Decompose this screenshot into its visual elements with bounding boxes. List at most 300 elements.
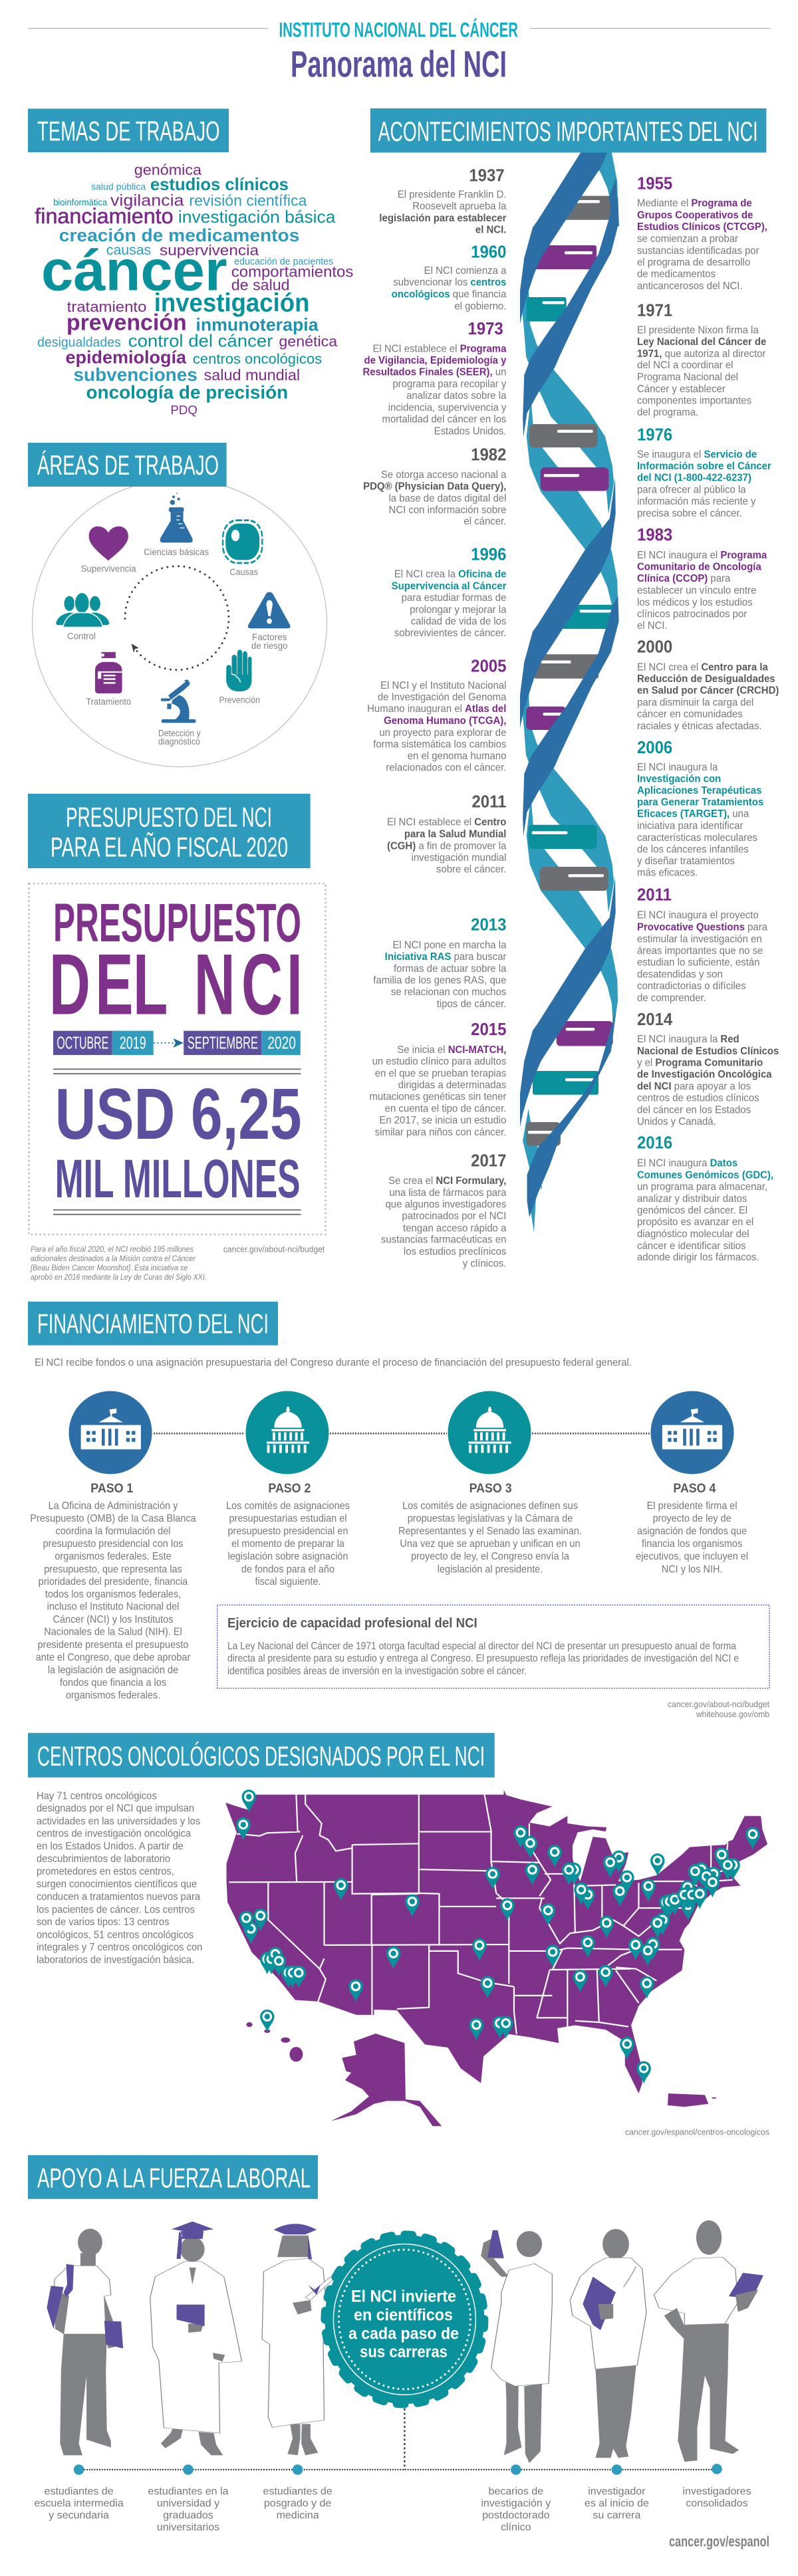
career labels: investigador (588, 2486, 646, 2497)
milestone 2013: 2013 (471, 916, 506, 935)
milestone 2017: Se crea el NCI Formulary, (388, 1175, 506, 1187)
panel: centros oncológicos (28, 1733, 769, 2137)
badge: el NCI invierte: a cada paso de (348, 2324, 459, 2343)
career labels: estudiantes de (45, 2486, 114, 2497)
career labels: escuela intermedia (34, 2498, 124, 2510)
step 4: ejecutivos, que incluyen el (636, 1550, 748, 1562)
word cloud: investigación básica (178, 207, 336, 227)
milestone 1955 (637, 175, 767, 292)
badge: el NCI invierte (325, 2235, 484, 2404)
paragraph: prometedores en estos centros, (37, 1865, 174, 1877)
map of the United States (225, 1790, 767, 2126)
milestone 2006: 2006 (637, 739, 672, 757)
milestone 1976: Se inaugura el Servicio de (637, 449, 757, 461)
title: Panorama del NCI: Panorama del NCI (291, 43, 507, 84)
milestone 1982: la base de datos digital del (388, 493, 506, 504)
paragraph: actividades en las universidades y los (37, 1815, 200, 1827)
step icon 3: capitol (448, 1391, 531, 1474)
milestone 1983: el NCI. (637, 620, 668, 632)
milestone 2017: sustancias farmacéuticas en (381, 1234, 506, 1246)
step 2: el momento de preparar la (231, 1538, 344, 1550)
area labels: Detección y (158, 728, 201, 738)
word cloud: subvenciones (73, 364, 198, 385)
heading: centros oncológicos designados: CENTROS ONCOLÓGICOS DESIGNADOS POR EL NCI (37, 1740, 485, 1772)
milestone 2011 provocative questions: estudian lo suficiente, están (637, 957, 759, 969)
milestone 2014: del NCI para apoyar a los (637, 1080, 751, 1092)
milestone 2011 global health: El NCI establece el Centro (387, 816, 506, 828)
paragraph: centros de investigación oncológica (37, 1827, 192, 1839)
milestone 2015: en el que se prueban terapias (375, 1068, 507, 1080)
icon: heart (89, 527, 128, 560)
milestone 2016: cáncer e identificar sitios (637, 1240, 746, 1252)
badge: el NCI invierte: El NCI invierte (351, 2287, 456, 2306)
big text: presupuesto: PRESUPUESTO (53, 893, 301, 953)
milestone 1996: prolongar y mejorar la (410, 604, 507, 616)
panel: temas de trabajo (28, 109, 353, 417)
step 3: legislación al presidente. (438, 1564, 543, 1575)
milestone 2006: características moleculares (637, 832, 757, 844)
milestone 2017: tengan acceso rápido a (403, 1223, 507, 1234)
heading: presupuesto del NCI: PRESUPUESTO DEL NCI (66, 802, 272, 832)
big number: USD 6,25: USD 6,25 (55, 1074, 302, 1155)
panel: acontecimientos importantes (362, 0, 779, 1269)
milestone 1960: El NCI comienza a (424, 265, 507, 277)
big text: mil millones: MIL MILLONES (55, 1149, 301, 1209)
step 3: Una vez que se aprueban y unifican en un (400, 1538, 581, 1550)
milestone 2011 provocative questions: estimular la investigación en (637, 933, 762, 945)
paragraph: en los Estados Unidos. A partir de (37, 1841, 184, 1852)
map: state borders (229, 1795, 735, 2034)
icon: people (56, 592, 110, 628)
word cloud: oncología de precisión (86, 382, 288, 403)
milestone 1955: Mediante el Programa de (637, 197, 752, 209)
milestone 2011 provocative questions: de comprender. (637, 993, 706, 1004)
milestone 2000: 2000 (637, 638, 672, 657)
milestone 1982: 1982 (471, 446, 506, 465)
paragraph: laboratorios de investigación básica. (37, 1954, 194, 1966)
milestone 2017: y clínicos. (463, 1258, 506, 1269)
milestone 2014 (637, 1010, 779, 1127)
milestone 1973: Estados Unidos. (434, 425, 506, 437)
paragraph (37, 1790, 202, 1966)
milestone 1983: 1983 (637, 527, 672, 544)
milestone 1955: Grupos Cooperativos de (637, 209, 753, 221)
source links (668, 1699, 769, 1719)
milestone 1971: Programa Nacional del (637, 372, 738, 383)
milestone 1996: para estudiar formas de (402, 592, 506, 604)
milestone 2000: cáncer en comunidades (637, 709, 743, 720)
milestone 2011 global health: para la Salud Mundial (404, 828, 506, 840)
figure: school student (47, 2229, 123, 2455)
left timeline column (362, 167, 507, 1269)
word cloud: causas (106, 243, 151, 258)
milestone 2006: más eficaces. (637, 867, 698, 879)
milestone 2011 global health: (CGH) a fin de promover la (387, 840, 507, 852)
step 1: PASO 1 (90, 1481, 133, 1496)
career labels: y secundaria (49, 2510, 109, 2521)
milestone 2014: y el Programa Comunitario (637, 1057, 763, 1069)
milestone 1996: calidad de vida de los (411, 616, 507, 628)
milestone 2015: similar para niños con cáncer. (375, 1127, 506, 1138)
step 3: Representantes y el Senado las examinan. (398, 1526, 582, 1537)
milestone 1996 (392, 546, 507, 639)
source links: whitehouse.gov/omb (696, 1709, 769, 1719)
step 4: financia los organismos (642, 1538, 743, 1550)
source links: cancer.gov/about-nci/budget (668, 1699, 769, 1709)
milestone 1982: PDQ® (Physician Data Query), (363, 481, 506, 493)
milestone 2006: El NCI inaugura la (637, 761, 718, 773)
milestone 2011 provocative questions: 2011 (637, 886, 672, 905)
area labels: Prevención (219, 695, 260, 705)
milestone 1982: Se otorga acceso nacional a (381, 469, 507, 481)
heading: áreas de trabajo: ÁREAS DE TRABAJO (37, 449, 219, 481)
area labels (67, 547, 287, 747)
milestone 1982 (363, 446, 507, 527)
milestone 2011 global health: sobre el cáncer. (436, 864, 506, 876)
map pins (236, 1790, 760, 2083)
footnote: adicionales destinados a la Misión contra el Cáncer (31, 1254, 196, 1263)
paragraph: designados por el NCI que impulsan (37, 1802, 194, 1814)
step 4: NCI y los NIH. (662, 1564, 722, 1575)
milestone 2011 global health: 2011 (471, 793, 507, 812)
milestone 1960: oncológicos que financia (392, 289, 507, 300)
paragraph: surgen conocimientos científicos que (37, 1878, 197, 1890)
step 2: de fondos para el año (241, 1564, 334, 1575)
milestone 2015: mutaciones genéticas sin tener (369, 1091, 506, 1103)
milestone 2016: propósito es avanzar en el (637, 1217, 753, 1228)
heading: financiamiento del NCI (28, 1302, 278, 1346)
word cloud: financiamiento (35, 204, 174, 228)
milestone 2005: de Investigación del Genoma (378, 691, 507, 703)
milestone 2011 provocative questions: El NCI inaugura el proyecto (637, 909, 759, 921)
paragraph: oncológicos, 51 centros oncológicos (37, 1929, 194, 1940)
milestone 1955: sustancias identificadas por (637, 245, 759, 257)
milestone 1971: del NCI a coordinar el (637, 360, 733, 371)
big text: del NCI: DEL NCI (49, 937, 303, 1033)
figures (47, 2220, 763, 2463)
milestone 2005 (367, 657, 507, 774)
step icon 2: capitol (246, 1391, 329, 1474)
figure: postdoctoral researcher (481, 2230, 552, 2463)
paragraph: Hay 71 centros oncológicos (37, 1790, 157, 1802)
milestone 2016: 2016 (637, 1134, 672, 1153)
date range: octubre 2019 (53, 1031, 154, 1055)
step 2: PASO 2 (268, 1481, 311, 1496)
heading: apoyo a la fuerza laboral: APOYO A LA FUERZA LABORAL (37, 2163, 311, 2194)
milestone 2005: Genoma Humano (TCGA), (384, 715, 506, 727)
step 2 (226, 1481, 350, 1587)
word cloud: estudios clínicos (150, 174, 289, 194)
date range: octubre 2019: 2019 (120, 1033, 146, 1053)
milestone 2016: un programa para almacenar, (637, 1181, 767, 1193)
milestone 2006 (637, 739, 763, 879)
step 2: fiscal siguiente. (255, 1576, 321, 1587)
milestone 2006: Aplicaciones Terapéuticas (637, 785, 761, 796)
career labels (34, 2486, 751, 2533)
timeline (74, 2408, 722, 2475)
milestone 1960: el gobierno. (454, 300, 506, 312)
milestone 1955: Estudios Clínicos (CTCGP), (637, 221, 767, 233)
icon: warning triangle (248, 592, 291, 628)
milestone 2017: que algunos investigadores (385, 1199, 507, 1211)
word cloud: revisión científica (189, 192, 307, 209)
step 1: Cáncer (NCI) y los Institutos (53, 1613, 174, 1625)
step 3: proyecto de ley, el Congreso envía la (411, 1550, 569, 1562)
milestone 1937: Roosevelt aprueba la (412, 201, 507, 212)
source link: cancer.gov/espanol/centros-oncologicos (625, 2127, 769, 2137)
step 1: fondos que financia a los (60, 1677, 166, 1689)
milestone 2005: en el genoma humano (408, 751, 506, 762)
milestone 2011 global health (387, 793, 507, 876)
heading: áreas de trabajo (28, 443, 227, 487)
word cloud: centros oncológicos (193, 352, 322, 367)
milestone 2014: del cáncer en los Estados (637, 1104, 751, 1116)
milestone 1976: para ofrecer al público la (637, 484, 746, 496)
step 1: La Oficina de Administración y (49, 1500, 178, 1512)
word cloud: genómica (134, 162, 202, 178)
step 1: presupuesto, que representa las (44, 1564, 182, 1575)
icon: microscope (161, 679, 196, 723)
word cloud: inmunoterapia (196, 314, 319, 334)
step icon 4: white house (650, 1391, 734, 1474)
milestone 1973: El NCI establece el Programa (372, 343, 507, 354)
milestone 1973: programa para recopilar y (392, 378, 507, 390)
milestone 2011 provocative questions: contradictorias o difíciles (637, 981, 746, 992)
word cloud: comportamientos (231, 263, 353, 280)
step 1: organismos federales. (66, 1689, 160, 1701)
step 1 (30, 1481, 196, 1701)
map: puerto rico (668, 2093, 716, 2107)
cycle icons (56, 493, 291, 723)
word cloud (35, 162, 353, 417)
step 2: legislación sobre asignación (227, 1550, 348, 1562)
milestone 1983 (637, 527, 767, 632)
milestone 1971: El presidente Nixon firma la (637, 324, 759, 336)
milestone 2015: Se inicia el NCI-MATCH, (397, 1044, 506, 1056)
footnote: Para el año fiscal 2020, el NCI recibió 195 millones (31, 1244, 194, 1254)
milestone 2013: tipos de cáncer. (437, 998, 506, 1010)
paragraph: conducen a tratamientos nuevos para (37, 1891, 201, 1903)
paragraph: descubrimientos de laboratorio (37, 1853, 170, 1865)
milestone 2013: familia de los genes RAS, que (373, 975, 506, 987)
milestone 2017: 2017 (471, 1152, 506, 1171)
career labels: clínico (501, 2522, 531, 2533)
milestone 1973: de Vigilancia, Epidemiología y (364, 355, 507, 366)
milestone 1971: 1971, que autoriza al director (637, 348, 766, 360)
step 1: ante el Congreso, que debe aprobar (36, 1651, 190, 1663)
icon: hand (226, 650, 251, 691)
career labels: universitarios (157, 2522, 219, 2533)
word cloud: bioinformática (53, 197, 107, 207)
milestone 1955: de medicamentos (637, 269, 716, 280)
milestone 1983: los médicos y los estudios (637, 596, 753, 608)
panel: áreas de trabajo (28, 443, 327, 767)
career labels: universidad y (157, 2498, 219, 2510)
career labels: estudiantes de (263, 2486, 332, 2497)
callout: ejercicio de capacidad profesional: directa al presidente para su estudio y entrega al Congreso. El presupuesto refleja las prioridades de investigación del NCI e (227, 1653, 739, 1665)
panel: presupuesto (28, 794, 326, 1282)
milestone 2017: los estudios preclínicos (404, 1246, 507, 1258)
milestone 1955: 1955 (637, 175, 672, 193)
milestone 2013: Iniciativa RAS para buscar (385, 951, 506, 963)
milestone 2017 (381, 1152, 507, 1269)
step 4 (636, 1481, 748, 1575)
callout: ejercicio de capacidad profesional: Ejercicio de capacidad profesional del NCI (227, 1616, 477, 1631)
source link: cancer.gov/about-nci/budget (223, 1245, 325, 1254)
milestone 2015: un estudio clínico para adultos (372, 1056, 507, 1068)
paragraph: integrales y 7 centros oncológicos con (37, 1941, 202, 1953)
milestone 1983: Clínica (CCOP) para (637, 573, 731, 584)
paragraph: los pacientes de cáncer. Los centros (37, 1904, 195, 1915)
word cloud: epidemiología (65, 347, 187, 367)
word cloud: cáncer (41, 239, 227, 302)
badge: el NCI invierte: en científicos (354, 2306, 453, 2325)
milestone 2015 (369, 1020, 507, 1138)
milestone 1955: se comienzan a probar (637, 233, 738, 245)
milestone 2014: Nacional de Estudios Clínicos (637, 1045, 779, 1057)
footnote: [Beau Biden Cancer Moonshot]. Esta iniciativa se (30, 1263, 188, 1272)
step 1: Nacionales de la Salud (NIH). El (44, 1626, 182, 1638)
milestone 2005: El NCI y el Instituto Nacional (380, 680, 506, 691)
milestone 1971: 1971 (637, 302, 672, 320)
career labels: es al inicio de (585, 2498, 649, 2510)
icon: bottle (95, 652, 122, 693)
step 4: proyecto de ley de (652, 1512, 732, 1524)
step 1: presupuesto presidencial con los (43, 1538, 184, 1550)
header rule (28, 28, 770, 29)
panel: financiamiento (28, 1302, 769, 1719)
milestone 2011 global health: investigación mundial (412, 852, 506, 864)
career labels: consolidados (686, 2498, 748, 2510)
milestone 1976: información más reciente y (637, 496, 756, 507)
figure: established investigator (654, 2220, 763, 2462)
career labels: graduados (163, 2510, 213, 2521)
milestone 1973: 1973 (467, 320, 503, 338)
milestone 1983: establecer un vínculo entre (637, 584, 756, 596)
step 3: Los comités de asignaciones definen sus (402, 1500, 578, 1512)
milestone 2016: Comunes Genómicos (GDC), (637, 1169, 773, 1181)
milestone 2006: Investigación con (637, 773, 721, 785)
step 4: El presidente firma el (647, 1500, 737, 1512)
milestone 1937: el NCI. (475, 224, 506, 236)
word cloud: genética (279, 333, 338, 350)
step 4: asignación de fondos que (637, 1526, 747, 1537)
heading: temas de trabajo (28, 109, 229, 152)
milestone 2017: patrocinados por el NCI (402, 1211, 506, 1222)
step 1: la legislación de asignación de (48, 1664, 178, 1676)
milestone 1973: Resultados Finales (SEER), un (362, 366, 506, 378)
area labels: Factores (252, 632, 287, 642)
step 3 (398, 1481, 582, 1575)
area labels: diagnóstico (158, 737, 200, 747)
step 2: Los comités de asignaciones (226, 1500, 350, 1512)
milestone 1996: 1996 (471, 546, 506, 564)
map: hawaii (246, 2022, 303, 2061)
milestone 1976 (637, 426, 771, 519)
milestone 1976: Información sobre el Cáncer (637, 461, 771, 472)
milestone 2006: Eficaces (TARGET), una (637, 808, 749, 820)
milestone 2014: 2014 (637, 1010, 672, 1029)
area labels: Supervivencia (81, 564, 136, 574)
milestone 1971: componentes importantes (637, 395, 751, 407)
milestone 2011 provocative questions: desatendidas y son (637, 969, 723, 980)
heading: centros oncológicos designados (28, 1733, 495, 1778)
milestone 2015: en cuenta el tipo de cáncer. (385, 1103, 506, 1115)
milestone 2006: iniciativa para identificar (637, 820, 743, 832)
step 2: presupuesto presidencial en (227, 1526, 348, 1537)
word cloud: PDQ (170, 404, 198, 417)
word cloud: control del cáncer (128, 331, 273, 351)
milestone 2016: El NCI inaugura Datos (637, 1157, 737, 1169)
word cloud: investigación (154, 289, 310, 317)
milestone 2016: analizar y distribuir datos (637, 1193, 747, 1205)
milestone 2011 provocative questions (637, 886, 767, 1004)
milestone 2006: y diseñar tratamientos (637, 856, 735, 867)
step 1: todos los organismos federales, (45, 1588, 181, 1600)
heading: temas de trabajo: TEMAS DE TRABAJO (37, 116, 219, 146)
word cloud: salud pública (91, 181, 146, 191)
career labels: medicina (277, 2510, 319, 2521)
career labels: investigación y (481, 2498, 551, 2510)
milestone 1937: 1937 (469, 167, 505, 185)
milestone 1982: NCI con información sobre (389, 505, 506, 516)
milestone 1960: 1960 (471, 243, 506, 262)
career labels: investigadores (682, 2486, 751, 2497)
milestone 1971 (637, 302, 767, 418)
step 3: propuestas legislativas y la Cámara de (408, 1512, 573, 1524)
milestone 2015: En 2017, se inicia un estudio (379, 1115, 506, 1126)
milestone 2013: formas de actuar sobre la (394, 963, 507, 975)
map: contiguous states (225, 1790, 767, 2093)
badge: el NCI invierte: sus carreras (360, 2343, 448, 2361)
milestone 1996: El NCI crea la Oficina de (394, 568, 507, 580)
milestone 2016 (637, 1134, 773, 1263)
milestone 2000: Reducción de Desigualdades (637, 673, 775, 685)
milestone 2011 provocative questions: Provocative Questions para (637, 921, 767, 933)
milestone 1971: del programa. (637, 407, 698, 418)
panel: apoyo a la fuerza laboral (28, 2155, 769, 2550)
title: Instituto Nacional del Cáncer: INSTITUTO NACIONAL DEL CÁNCER (279, 17, 518, 41)
dotted frame (29, 883, 326, 1234)
milestone 2006: para Generar Tratamientos (637, 796, 763, 808)
step 1: presidente presenta el presupuesto (38, 1639, 188, 1651)
DNA helix (520, 153, 619, 1232)
heading: acontecimientos importantes del NCI (370, 108, 766, 153)
milestone 2014: de Investigación Oncológica (637, 1069, 772, 1080)
area labels: Tratamiento (86, 697, 131, 707)
milestone 2014: El NCI inaugura la Red (637, 1034, 739, 1045)
paragraph: son de varios tipos: 13 centros (37, 1916, 170, 1928)
career labels: posgrado y de (264, 2498, 331, 2510)
footnote (30, 1244, 207, 1282)
word cloud: vigilancia (110, 192, 184, 210)
milestone 2000: El NCI crea el Centro para la (637, 661, 768, 673)
milestone 1976: 1976 (637, 426, 672, 444)
milestone 2013 (373, 916, 507, 1010)
milestone 2000: raciales y étnicas afectadas. (637, 720, 762, 732)
milestone 2015: dirigidas a determinadas (398, 1080, 507, 1091)
milestone 2000: para disminuir la carga del (637, 697, 753, 709)
milestone 2006: de los cánceres infantiles (637, 844, 749, 856)
milestone 1973: mortalidad del cáncer en los (382, 413, 507, 425)
footnote: aprobó en 2016 mediante la Ley de Curas del Siglo XXI. (31, 1272, 207, 1282)
milestone 1973: analizar datos sobre la (406, 390, 507, 402)
word cloud: desigualdades (37, 335, 121, 350)
area labels: Causas (229, 567, 258, 577)
word cloud: de salud (231, 277, 290, 294)
career labels: estudiantes en la (148, 2486, 229, 2497)
milestone 2016: diagnóstico molecular del (637, 1229, 749, 1240)
